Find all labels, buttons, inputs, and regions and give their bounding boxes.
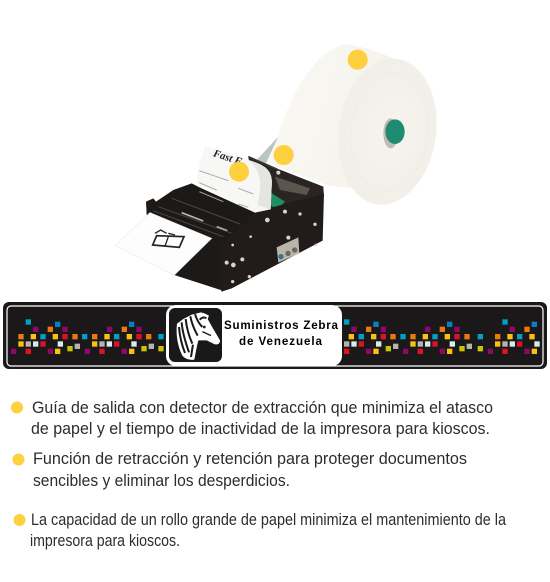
bullet 1 [11,402,23,414]
brand name [224,319,339,348]
brand name: Suministros Zebra [224,319,339,332]
feature 2 text [33,450,467,490]
exit paper with icon [115,213,212,275]
roll hub [383,118,405,148]
feature 2 text: Función de retracción y retención para proteger documentos [33,450,467,468]
yellow marker: ticket [229,162,249,182]
brand name: de Venezuela [239,335,323,348]
feature 3 [14,511,507,550]
feature 1 text: Guía de salida con detector de extracción que minimiza el atasco [32,399,493,417]
feature 3 text [30,511,507,550]
feature 1 text [31,399,493,438]
yellow marker: roll [348,50,368,70]
wedge under paper [174,238,221,290]
printer body [146,157,324,292]
rear top of printer [248,157,324,217]
colour pixel pattern [11,319,164,354]
feature 1 text: de papel y el tiempo de inactividad de la impresora para kioscos. [31,420,490,438]
rail frame [146,183,257,247]
feature 1 [11,399,493,438]
printed ticket curling out of printer [197,146,277,213]
bullet 3 [14,514,26,526]
feature 3 text: impresora para kioscos. [30,532,180,550]
banner [3,302,547,369]
central white brand panel [166,305,342,366]
paper roll [257,44,446,211]
zebra logo [169,308,222,362]
feature 2 text: sencibles y eliminar los desperdicios. [33,472,290,490]
product photo: kiosk printer with paper roll [115,44,446,292]
front face [219,193,324,292]
colour pixel pattern right [344,319,540,354]
control plate [277,237,299,263]
yellow marker: paper path [274,145,294,165]
bullet 2 [12,454,24,466]
printed ticket curling out of printer: Fast F [211,148,243,168]
feature 2 [12,450,467,490]
